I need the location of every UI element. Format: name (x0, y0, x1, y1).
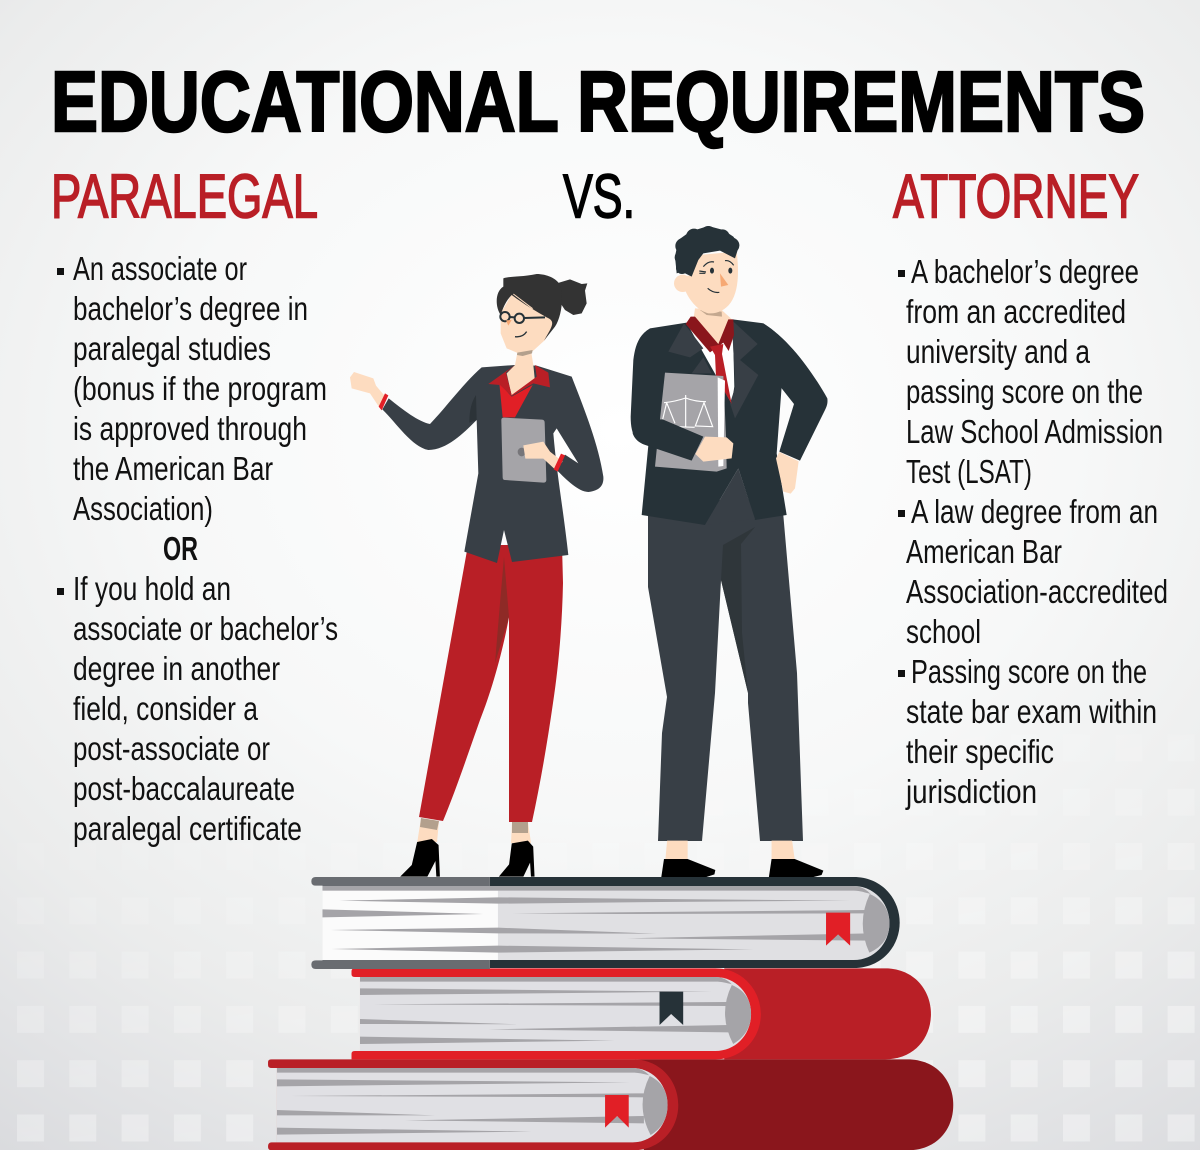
text block: attorney requirements: American Bar (906, 533, 1062, 570)
man collar (686, 317, 734, 352)
man neck (693, 308, 733, 350)
man folder (655, 373, 727, 472)
text block: paralegal requirements: If you hold an (73, 570, 231, 607)
man right arm (763, 323, 828, 461)
heading: paralegal: PARALEGAL (51, 162, 318, 232)
man trousers (648, 500, 803, 841)
text block: attorney requirements: Test (LSAT) (906, 453, 1032, 490)
woman tablet hand (523, 442, 563, 469)
woman tablet (501, 418, 546, 483)
man tie (710, 344, 732, 404)
man lapels (668, 323, 703, 357)
text block: paralegal requirements: is approved through (73, 410, 307, 447)
woman hair bun (557, 279, 587, 315)
woman ankles (417, 818, 531, 844)
text block: paralegal requirements: post-associate or (73, 730, 270, 767)
text block: paralegal requirements: An associate or (73, 250, 247, 287)
text block: attorney requirements: from an accredited (906, 293, 1126, 330)
man waist gap (705, 468, 755, 525)
text block: paralegal requirements: post-baccalaureate (73, 770, 295, 807)
woman hair (497, 274, 562, 341)
woman shoes (400, 839, 535, 877)
bookmark: red (826, 913, 850, 946)
text block: paralegal requirements: Association) (73, 490, 213, 527)
man jacket (631, 319, 827, 525)
man folder sleeve (633, 419, 703, 461)
man face details (710, 268, 732, 274)
text block: paralegal requirements: degree in another (73, 650, 280, 687)
woman glasses (500, 312, 545, 323)
woman trousers (419, 545, 563, 822)
man folder hand (695, 437, 733, 462)
text block: attorney requirements: university and a (906, 333, 1091, 370)
text block: attorney requirements: their specific (906, 733, 1054, 770)
man ankles and shoes (661, 841, 823, 877)
man trouser fold (721, 527, 755, 693)
illustration: paralegal woman (350, 274, 603, 877)
man head (674, 275, 691, 292)
text block: paralegal requirements: (bonus if the program (73, 370, 327, 407)
text block: paralegal requirements: field, consider a (73, 690, 259, 727)
bottom book (268, 1059, 953, 1150)
woman face (501, 292, 555, 354)
text block: attorney requirements: school (906, 613, 981, 650)
text block: paralegal requirements: OR (163, 530, 198, 567)
woman left hand (350, 372, 385, 407)
text block: attorney requirements (898, 253, 1168, 810)
text block: attorney requirements: A bachelor’s degree (911, 253, 1139, 290)
text block: paralegal requirements: associate or bachelor’s (73, 610, 338, 647)
bookmark: dark (660, 992, 683, 1025)
text block: attorney requirements: jurisdiction (905, 773, 1037, 810)
woman blouse (499, 383, 533, 417)
heading: versus: VS. (563, 162, 635, 232)
icon: scales of justice (663, 395, 713, 427)
text block: paralegal requirements: paralegal studies (73, 330, 271, 367)
middle book (352, 968, 931, 1059)
man hip hand (776, 452, 799, 494)
man hair (675, 226, 739, 277)
woman jacket (382, 365, 603, 563)
illustration: stack of books (268, 877, 953, 1150)
woman trouser fold (495, 557, 509, 663)
woman neck (507, 351, 535, 396)
illustration: attorney man (631, 226, 828, 877)
bookmark: red (605, 1095, 629, 1128)
text block: paralegal requirements: bachelor’s degree in (73, 290, 308, 327)
woman cuffs (379, 393, 388, 410)
top book (311, 877, 900, 969)
woman socks (420, 818, 528, 833)
text block: paralegal requirements: paralegal certificate (73, 810, 302, 847)
man shirt (702, 333, 736, 407)
text block: paralegal requirements: the American Bar (73, 450, 273, 487)
woman collar (488, 365, 550, 396)
text block: paralegal requirements (57, 250, 338, 847)
